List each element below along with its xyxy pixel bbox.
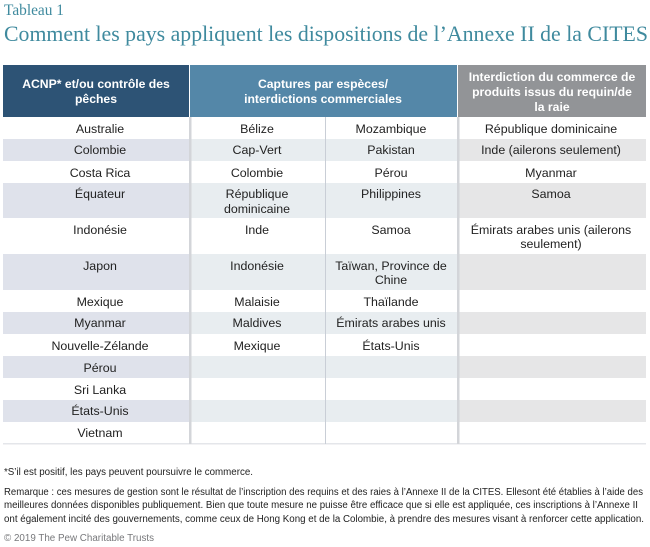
column 2: captures left: dominicaine	[224, 202, 290, 216]
column 3: captures right	[335, 122, 447, 353]
note: meilleures données disponibles publiquement. Bien que toute mesure ne puisse être efficace que si elle est appliquée, ces inscriptions à l’Annexe II	[4, 500, 638, 511]
column 4: trade bans: Myanmar	[525, 166, 577, 180]
title: Comment les pays appliquent les dispositions de l’Annexe II de la CITES	[4, 21, 648, 46]
column 3: captures right: Chine	[375, 273, 407, 287]
column 3: captures right: Thaïlande	[363, 295, 419, 309]
column 1: countries: États-Unis	[71, 403, 129, 418]
copyright: © 2019 The Pew Charitable Trusts	[4, 533, 154, 544]
column 1: countries	[51, 122, 149, 440]
column 2: captures left	[224, 122, 290, 353]
column 1: countries: Japon	[83, 259, 117, 273]
column 2: captures left: Maldives	[233, 316, 281, 330]
header: ACNP: ACNP* et/ou contrôle des	[22, 77, 170, 91]
column 1: countries: Mexique	[77, 295, 124, 309]
column 3: captures right: Mozambique	[356, 122, 427, 136]
column 2: captures left: Inde	[245, 223, 269, 237]
column 2: captures left: République	[226, 187, 288, 201]
column 1: countries: Sri Lanka	[74, 383, 126, 397]
header: Interdiction: la raie	[534, 100, 570, 114]
column 4: trade bans	[471, 122, 631, 251]
note: ont également incité des gouvernements, comme ceux de Hong Kong et de la Colombie, à prendre des mesures visant à renforcer cette application.	[4, 514, 644, 525]
header: Captures	[190, 65, 457, 117]
column 2: captures left: Colombie	[231, 166, 283, 180]
note: Remarque : ces mesures de gestion sont le résultat de l’inscription des requins et des raies à l’Annexe II de la CITES. Ellesont été établies à l’aide des	[4, 487, 643, 498]
column 1: countries: Nouvelle-Zélande	[51, 339, 149, 353]
column 4: trade bans: seulement)	[520, 237, 582, 251]
column 2: captures left: Cap-Vert	[233, 143, 282, 157]
column 3: captures right: Émirats arabes unis	[336, 315, 446, 330]
header: ACNP: pêches	[75, 92, 117, 106]
column 3: captures right: Pakistan	[367, 143, 415, 157]
column 2: captures left: Bélize	[240, 122, 274, 136]
header: Captures: Captures par espèces/	[258, 77, 389, 91]
row shading	[3, 117, 646, 444]
column 2: captures left: Indonésie	[230, 259, 284, 273]
column 3: captures right: Philippines	[361, 187, 421, 201]
label: Tableau 1: Tableau 1	[4, 2, 64, 19]
table	[3, 65, 646, 444]
column 1: countries: Australie	[76, 122, 124, 136]
note	[4, 487, 644, 525]
column 4: trade bans: Samoa	[531, 187, 571, 201]
column 1: countries: Pérou	[83, 361, 117, 375]
column 4: trade bans: Émirats arabes unis (ailerons	[471, 222, 631, 237]
column 2: captures left: Malaisie	[234, 295, 280, 309]
column 3: captures right: Taïwan, Province de	[335, 259, 447, 273]
column 1: countries: Vietnam	[77, 426, 123, 440]
header: Interdiction	[458, 65, 646, 117]
column 1: countries: Colombie	[74, 143, 126, 157]
column 4: trade bans: République dominicaine	[485, 122, 617, 136]
header: Interdiction: produits issus du requin/de	[472, 85, 632, 99]
footnote: *S’il est positif, les pays peuvent poursuivre le commerce.	[4, 467, 253, 478]
column 1: countries: Équateur	[75, 186, 125, 201]
column 1: countries: Indonésie	[73, 223, 127, 237]
column 1: countries: Myanmar	[74, 316, 126, 330]
column 3: captures right: Pérou	[374, 166, 408, 180]
column 4: trade bans: Inde (ailerons seulement)	[481, 143, 621, 157]
header: Interdiction: Interdiction du commerce de	[469, 70, 636, 84]
header: Captures: interdictions commerciales	[244, 92, 402, 106]
column 1: countries: Costa Rica	[70, 166, 130, 180]
column 2: captures left: Mexique	[234, 339, 281, 353]
column 3: captures right: États-Unis	[362, 338, 420, 353]
column 3: captures right: Samoa	[371, 223, 411, 237]
header: ACNP	[3, 65, 189, 117]
